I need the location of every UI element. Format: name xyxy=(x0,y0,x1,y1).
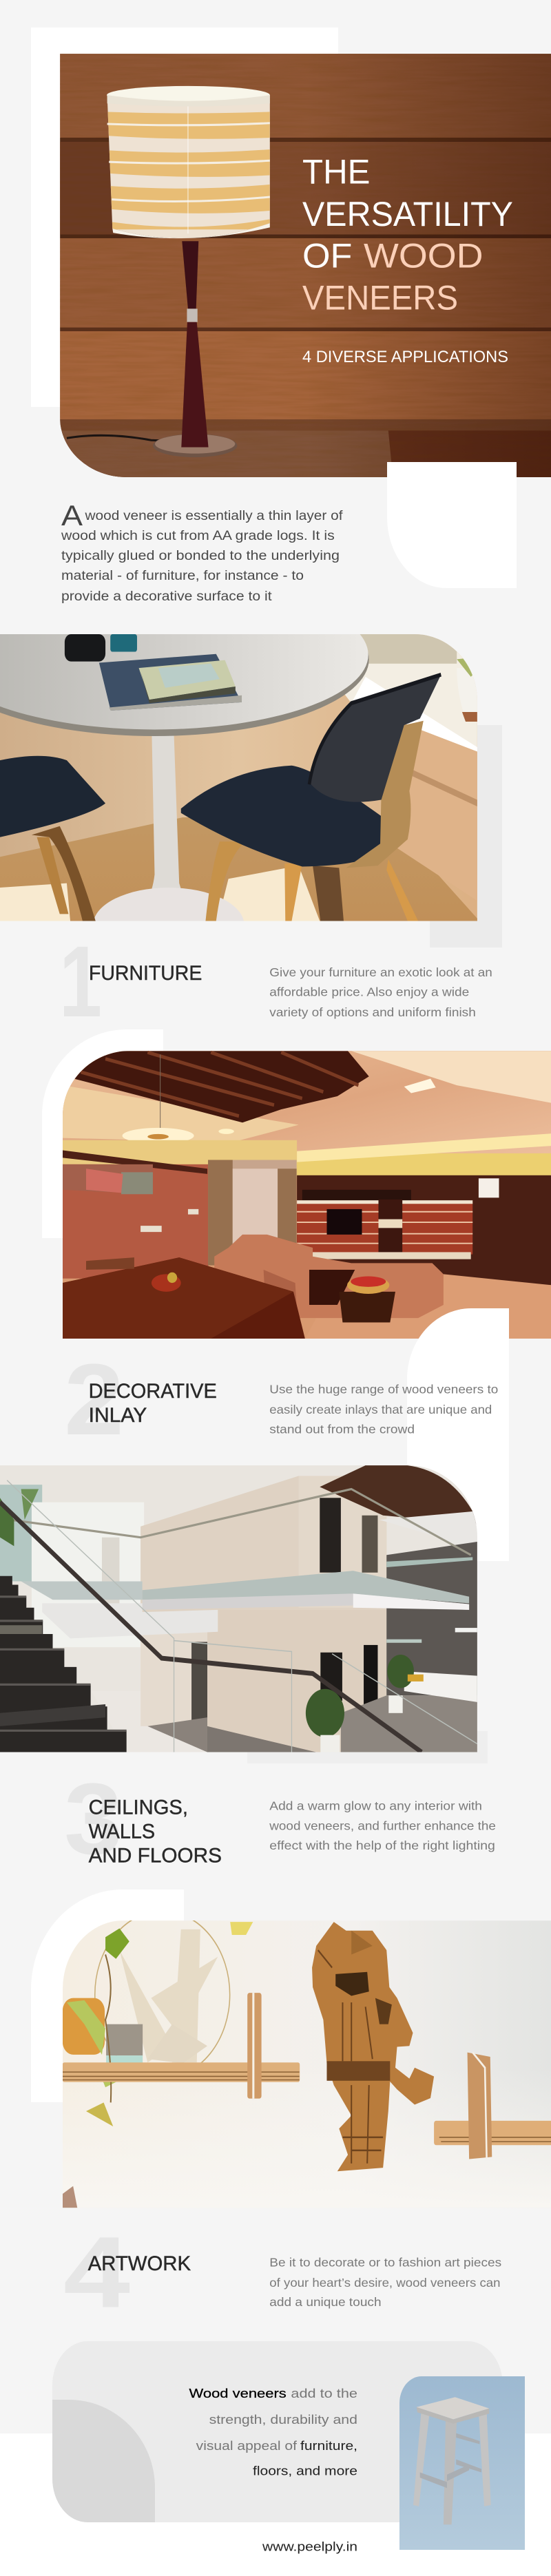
icon: table xyxy=(0,634,369,921)
text: artwork description: add a unique touch xyxy=(269,2295,382,2309)
icon: plant pot xyxy=(63,1929,143,2126)
text: ceilings description xyxy=(269,1799,496,1852)
number 4: 4 xyxy=(63,2216,130,2329)
icon: macrame ring xyxy=(94,1920,230,2063)
curtains and window xyxy=(208,1160,297,1266)
text: closing statement: strength, durability and xyxy=(209,2412,357,2427)
plants xyxy=(0,1489,424,1752)
hero title: THE xyxy=(302,153,371,191)
hero photo: table lamp on wood wall xyxy=(60,54,551,477)
icon: lamp base and cord xyxy=(67,434,237,457)
handrail xyxy=(0,1480,477,1752)
text: ceilings description: Add a warm glow to any interior with xyxy=(269,1799,482,1813)
heading: decorative inlay xyxy=(89,1380,217,1427)
icon: lamp stem xyxy=(181,241,209,448)
text: closing statement: visual appeal of xyxy=(196,2438,298,2453)
text: artwork description xyxy=(269,2256,501,2309)
photo: artwork on wall xyxy=(63,1911,551,2208)
dark stone wall xyxy=(386,1542,477,1695)
glass balcony xyxy=(10,1489,471,1638)
hero title: OF xyxy=(302,236,352,275)
slatted wood ceiling xyxy=(320,1465,477,1525)
dining table xyxy=(63,1257,305,1339)
text: artwork description: Be it to decorate or to fashion art pieces xyxy=(269,2256,501,2270)
number 3: 3 xyxy=(64,1763,123,1876)
panel: grey backing behind furniture photo xyxy=(430,725,502,947)
icon: stool xyxy=(413,2397,491,2524)
icon: striped lamp shade xyxy=(105,86,271,238)
icon: pendant lamp xyxy=(123,1054,436,1144)
heading: decorative inlay: INLAY xyxy=(89,1404,147,1427)
decorative dark corner shape xyxy=(52,2400,155,2522)
icon: shelf right xyxy=(434,2053,551,2159)
intro paragraph: wood veneer is essentially a thin layer of xyxy=(84,509,343,523)
inlay wall unit xyxy=(297,1133,551,1285)
icon: right chair xyxy=(181,675,441,921)
panel: closing grey card xyxy=(52,2341,503,2522)
panel: grey backing below staircase photo xyxy=(247,1731,488,1763)
photo: ceilings, walls and floors atrium xyxy=(0,1465,477,1752)
icon: plant pot on sill xyxy=(457,657,477,722)
text: furniture description: affordable price. Also enjoy a wide xyxy=(269,985,469,999)
wall left xyxy=(63,1140,297,1279)
intro paragraph: provide a decorative surface to it xyxy=(61,589,272,604)
icon: shelf left xyxy=(63,1993,300,2099)
panel: white tall shape right xyxy=(407,1308,509,1561)
text: ceilings description: effect with the help of the right lighting xyxy=(269,1839,495,1852)
icon: bottles, notebook and book xyxy=(65,634,242,711)
text: inlay description: Use the huge range of wood veneers to xyxy=(269,1383,498,1396)
website url: www.peelply.in xyxy=(262,2540,357,2553)
hero title: VERSATILITY xyxy=(302,195,513,233)
text: furniture description: Give your furniture an exotic look at an xyxy=(269,965,492,979)
text: furniture description xyxy=(269,965,492,1019)
sofa set xyxy=(214,1234,444,1322)
text: closing statement: Wood veneers xyxy=(189,2386,287,2400)
hero subtitle: 4 DIVERSE APPLICATIONS xyxy=(302,348,508,366)
photo: decorative inlay living room xyxy=(63,1051,551,1339)
staircase xyxy=(0,1576,127,1752)
intro paragraph: typically glued or bonded to the underlying xyxy=(61,549,340,563)
heading: ceilings, walls and floors: AND FLOORS xyxy=(89,1845,222,1867)
text: closing statement: add to the xyxy=(291,2386,357,2400)
text: ceilings description: wood veneers, and further enhance the xyxy=(269,1819,496,1832)
number 2: 2 xyxy=(64,1343,124,1456)
photo: stool on blue background xyxy=(399,2376,525,2550)
text: closing statement: floors, and more xyxy=(253,2464,357,2478)
text: furniture description: variety of options and uniform finish xyxy=(269,1005,476,1019)
icon: ceiling beams xyxy=(74,1051,369,1122)
heading: ceilings, walls and floors: WALLS xyxy=(89,1821,155,1843)
icon: left chair xyxy=(0,756,105,921)
heading: decorative inlay: DECORATIVE xyxy=(89,1380,217,1403)
text: closing statement xyxy=(189,2386,357,2478)
intro paragraph: material - of furniture, for instance - to xyxy=(61,569,304,583)
text: artwork description: of your heart’s desire, wood veneers can xyxy=(269,2276,500,2290)
panel: white backing behind artwork photo xyxy=(31,1889,184,2102)
intro paragraph: wood which is cut from AA grade logs. It is xyxy=(61,529,335,543)
icon: wooden figure artwork xyxy=(312,1922,434,2171)
hero title: VENEERS xyxy=(302,279,458,317)
text: inlay description: easily create inlays that are unique and xyxy=(269,1403,492,1416)
text: inlay description xyxy=(269,1383,498,1436)
text: inlay description: stand out from the crowd xyxy=(269,1423,415,1436)
number 1: 1 xyxy=(59,925,102,1038)
hero title xyxy=(302,153,513,317)
wood column xyxy=(141,1476,386,1752)
intro paragraph: A xyxy=(61,499,83,532)
heading: ceilings, walls and floors: CEILINGS, xyxy=(89,1796,188,1819)
hero title: WOOD xyxy=(364,236,484,275)
panel: white corner shape under hero xyxy=(387,462,517,588)
photo: furniture table and chairs xyxy=(0,634,477,921)
text: closing statement: furniture, xyxy=(300,2438,357,2453)
panel: white backing behind hero xyxy=(31,28,338,407)
floor xyxy=(92,1691,207,1752)
heading: ceilings, walls and floors xyxy=(89,1796,222,1867)
heading: furniture: FURNITURE xyxy=(89,962,202,985)
heading: artwork: ARTWORK xyxy=(88,2252,191,2275)
intro paragraph xyxy=(61,499,343,604)
panel: white backing behind interior photo xyxy=(42,1029,163,1238)
floor xyxy=(444,1274,551,1285)
